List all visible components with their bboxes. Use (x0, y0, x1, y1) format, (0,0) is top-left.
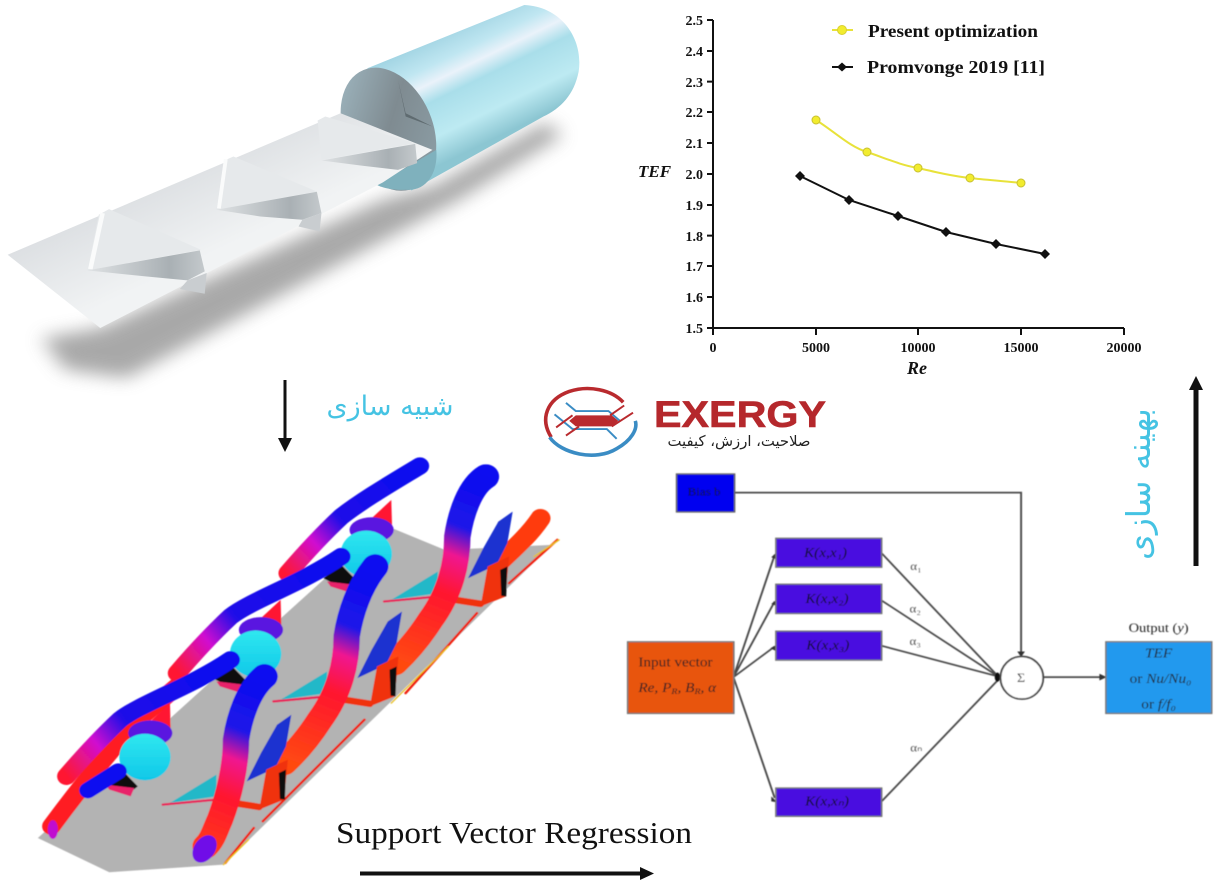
y tick labels (686, 14, 703, 337)
y axis title: TEF (638, 162, 672, 181)
box: input vector (628, 642, 734, 713)
tube shadow (42, 122, 561, 378)
box: kernel 3: K(x,x₃) (805, 638, 850, 653)
legend: Promvonge 2019 [11] (867, 57, 1045, 77)
y tick labels: 2.1 (686, 137, 703, 152)
weights: α₁ (910, 560, 922, 573)
weights: αₙ (910, 741, 922, 755)
connector lines (733, 493, 1103, 801)
winglet 2 (216, 157, 321, 231)
box: input vector: R (693, 687, 701, 697)
logo ring and channels (546, 389, 636, 455)
long vortex at lower left (51, 686, 177, 826)
box: input vector: Input vector (638, 655, 713, 670)
inner fin (398, 80, 432, 127)
box: kernel 2: K(x,x₂) (804, 592, 849, 607)
short blue vortex stub (88, 771, 118, 790)
x tick labels: 15000 (1004, 341, 1038, 356)
cylinder body (367, 5, 579, 190)
series: Promvonge 2019 (795, 171, 1050, 259)
box: kernel n (776, 788, 882, 816)
x tick labels (710, 341, 1142, 356)
vortex tube end (187, 831, 222, 867)
twisted vortex (395, 477, 486, 663)
box: input vector: Re, P (638, 681, 671, 695)
legend (832, 21, 1045, 77)
weights: α₂ (910, 602, 921, 615)
arrow: SVR right (360, 867, 654, 880)
logo: Exergy (546, 389, 826, 455)
box: kernel 2 (776, 584, 882, 614)
box: bias: Bias b (688, 485, 720, 498)
x tick labels: 20000 (1106, 341, 1142, 356)
summation node (1000, 656, 1043, 699)
right orange vortex (502, 518, 541, 560)
plate (8, 113, 432, 328)
x tick labels: 0 (710, 341, 716, 356)
x tick labels: 10000 (900, 341, 936, 356)
SVR network diagram (628, 474, 1212, 816)
arrow: simulation down (278, 380, 292, 452)
box: kernel n: K(x,xₙ) (804, 795, 849, 809)
y tick labels: 1.8 (686, 230, 703, 245)
y tick labels: 1.5 (686, 322, 703, 337)
red wedge (372, 500, 392, 525)
winglet 3 (318, 117, 417, 170)
weights: α₃ (910, 635, 921, 648)
flow structure visualization (38, 466, 559, 872)
repeated structure row 1 (66, 660, 291, 846)
cylinder opening (324, 57, 453, 201)
cap (350, 517, 394, 543)
y tick labels: 2.2 (686, 106, 703, 121)
label: optimization: بهینه سازی (1119, 408, 1158, 560)
y tick labels: 2.3 (686, 76, 703, 91)
label: output: Output (y) (1129, 621, 1189, 636)
box: input vector: R (670, 687, 678, 697)
illustration: tube with winglet plate (8, 5, 579, 378)
lower inner ring (377, 150, 437, 190)
chart: TEF vs Re (638, 14, 1142, 378)
arrowheads (771, 552, 1107, 802)
box: output: or f/f₀ (1141, 697, 1176, 712)
box: bias (677, 474, 735, 512)
y tick labels: 2.5 (686, 14, 703, 29)
logo tagline: صلاحیت، ارزش، کیفیت (668, 433, 810, 450)
y tick labels: 2.4 (686, 45, 703, 60)
winglet 1 (87, 209, 207, 294)
box: input vector: , B (677, 681, 695, 695)
lower left tip (48, 820, 58, 839)
caption: Support Vector Regression: Support Vector Regression (336, 815, 693, 850)
label: simulation: شبیه سازی (326, 391, 454, 422)
x axis title: Re (906, 358, 927, 378)
x tick labels: 5000 (802, 341, 830, 356)
logo wordmark: EXERGY (654, 394, 826, 435)
y tick labels: 1.7 (686, 260, 703, 275)
weights (910, 560, 922, 755)
series: present optimization (812, 116, 1025, 187)
axes (707, 20, 1124, 335)
box: output (1106, 642, 1212, 713)
summation node: Σ (1017, 671, 1025, 685)
small fin (468, 512, 513, 578)
box: output: or Nu/Nu₀ (1130, 672, 1191, 687)
edge streak lines (225, 540, 557, 863)
repeated structure row 3 (288, 466, 513, 663)
y tick labels: 1.9 (686, 199, 703, 214)
legend: Present optimization (868, 21, 1038, 41)
box: input vector: , α (701, 681, 717, 695)
arrow: optimization up (1189, 376, 1203, 566)
repeated structure row 2 (177, 557, 402, 763)
box: output: TEF (1145, 646, 1172, 661)
main vortex 3a (288, 466, 420, 573)
box: kernel 1 (776, 538, 882, 567)
box: kernel 3 (776, 631, 882, 660)
y tick labels: 2.0 (686, 168, 703, 183)
box: kernel 1: K(x,x₁) (803, 546, 847, 561)
bulb (341, 531, 392, 577)
gray plate (38, 525, 552, 872)
y tick labels: 1.6 (686, 291, 703, 306)
cyan wake (391, 572, 438, 600)
